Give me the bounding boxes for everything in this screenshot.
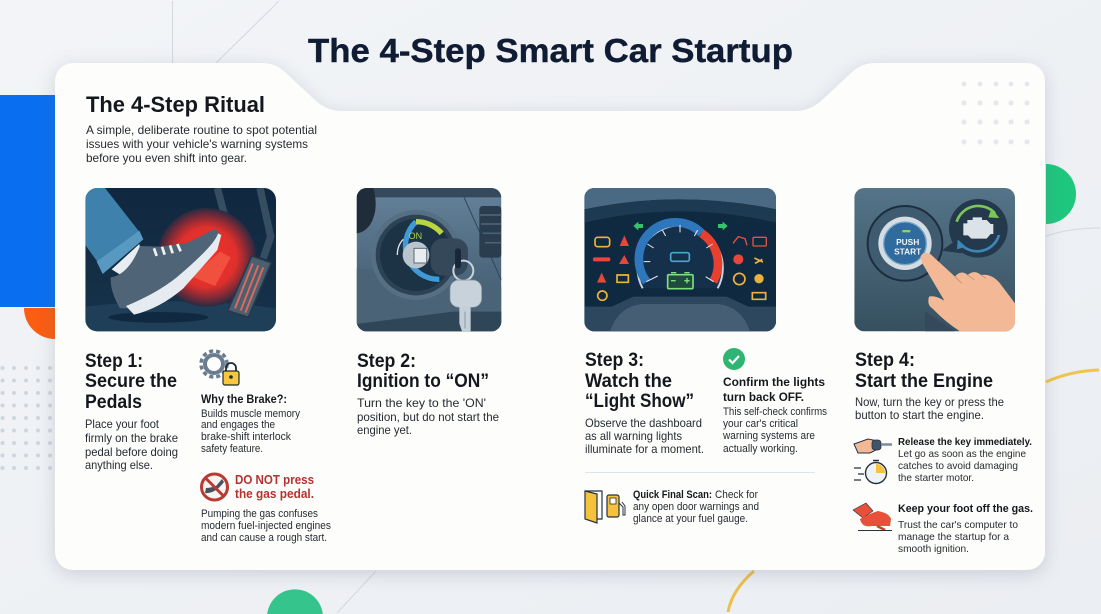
callout: quick final scan: any open door warnings and bbox=[633, 501, 759, 513]
text: step 3 body: Observe the dashboard bbox=[585, 416, 702, 430]
text: step 2 body: position, but do not start the bbox=[357, 410, 499, 424]
heading: step 2: Step 2: bbox=[357, 350, 416, 372]
callout: confirm the lights: turn back OFF. bbox=[723, 392, 804, 404]
callout: release the key bbox=[898, 436, 1032, 484]
callout: quick final scan: Check for bbox=[715, 489, 758, 501]
heading: step 4: Start the Engine bbox=[855, 370, 993, 392]
callout: confirm the lights: This self-check confirms bbox=[723, 406, 827, 418]
heading: step 3: Step 3: bbox=[585, 349, 644, 371]
callout: why the brake bbox=[201, 394, 300, 455]
icon: gear and padlock bbox=[201, 351, 239, 385]
text: step 1 body bbox=[85, 417, 178, 472]
callout: quick final scan: glance at your fuel gauge. bbox=[633, 513, 748, 525]
illustration: push start button: START bbox=[894, 247, 921, 257]
callout: why the brake: and engages the bbox=[201, 419, 275, 431]
callout: release the key: the starter motor. bbox=[898, 472, 974, 484]
text: pumping the gas bbox=[201, 508, 331, 544]
text: step 1 body: pedal before doing bbox=[85, 445, 178, 459]
panel: step 2 bbox=[357, 188, 501, 437]
illustration: key in ignition bbox=[357, 188, 501, 331]
callout: keep foot off gas: Trust the car's computer to bbox=[898, 519, 1018, 531]
panel: step 1 bbox=[85, 188, 331, 544]
callout: confirm the lights: your car's critical bbox=[723, 418, 798, 430]
callout: confirm the lights: Confirm the lights bbox=[723, 377, 825, 389]
callout: quick final scan bbox=[633, 489, 759, 525]
heading: step 4: Step 4: bbox=[855, 349, 915, 371]
text: step 4 body: Now, turn the key or press the bbox=[855, 395, 1004, 409]
icon: green check bbox=[723, 348, 745, 370]
callout: why the brake: Why the Brake?: bbox=[201, 394, 287, 406]
callout: why the brake: Builds muscle memory bbox=[201, 408, 300, 420]
card dot pattern bbox=[962, 82, 1030, 144]
callout: confirm the lights bbox=[722, 377, 827, 455]
callout: keep foot off gas bbox=[898, 503, 1033, 555]
warning: do not press: the gas pedal. bbox=[235, 486, 314, 501]
heading: step 2: Ignition to “ON” bbox=[357, 370, 489, 392]
intro text: before you even shift into gear. bbox=[86, 151, 247, 165]
callout: release the key: Let go as soon as the engine bbox=[898, 448, 1026, 460]
icon: hand with key bbox=[854, 439, 892, 453]
heading: step 3 bbox=[585, 349, 694, 412]
heading: step 1: Pedals bbox=[85, 391, 142, 413]
heading: step 3: Watch the bbox=[585, 370, 672, 392]
icon: stopwatch bbox=[854, 460, 886, 484]
callout: quick final scan: Quick Final Scan: bbox=[633, 489, 712, 501]
warning: do not press bbox=[235, 472, 314, 501]
callout: release the key: Release the key immediately. bbox=[898, 436, 1032, 448]
illustration: instrument cluster bbox=[584, 188, 776, 331]
heading: step 2 bbox=[357, 350, 489, 392]
callout: confirm the lights: warning systems are bbox=[722, 430, 815, 442]
heading: step 1: Step 1: bbox=[85, 350, 143, 372]
illustration: key in ignition: ON bbox=[409, 231, 422, 241]
text: step 1 body: firmly on the brake bbox=[85, 431, 178, 445]
illustration: push start button bbox=[854, 188, 1015, 331]
illustration: foot on brake pedal bbox=[85, 188, 276, 331]
callout: why the brake: brake-shift interlock bbox=[201, 431, 291, 443]
text: step 2 body bbox=[357, 396, 499, 437]
text: step 2 body: engine yet. bbox=[357, 423, 412, 437]
text: step 1 body: anything else. bbox=[85, 458, 153, 472]
callout: keep foot off gas: smooth ignition. bbox=[898, 543, 969, 555]
illustration: push start button: PUSH bbox=[896, 237, 919, 247]
intro text: issues with your vehicle's warning systems bbox=[86, 137, 308, 151]
text: step 4 body: button to start the engine. bbox=[855, 408, 984, 422]
text: pumping the gas: and can cause a rough start. bbox=[201, 532, 327, 544]
icon: foot off gas bbox=[853, 503, 892, 530]
text: pumping the gas: Pumping the gas confuses bbox=[201, 508, 318, 520]
panel: step 3 bbox=[584, 188, 827, 525]
callout: keep foot off gas: manage the startup for a bbox=[898, 531, 1009, 543]
callout: keep foot off gas: Keep your foot off the gas. bbox=[898, 503, 1033, 515]
warning: do not press: DO NOT press bbox=[235, 472, 314, 487]
main card bbox=[55, 63, 1045, 570]
icon: door and fuel pump bbox=[585, 491, 625, 523]
heading: step 3: “Light Show” bbox=[585, 390, 694, 412]
text: step 1 body: Place your foot bbox=[85, 417, 160, 431]
text: step 3 body: as all warning lights bbox=[585, 429, 682, 443]
callout: release the key: catches to avoid damaging bbox=[898, 460, 1018, 472]
intro text: A simple, deliberate routine to spot potential bbox=[86, 123, 317, 137]
text: step 3 body: illuminate for a moment. bbox=[585, 442, 704, 456]
panel: step 4 bbox=[853, 188, 1033, 555]
title: The 4-Step Smart Car Startup bbox=[308, 32, 793, 69]
callout: confirm the lights: actually working. bbox=[723, 443, 798, 455]
text: pumping the gas: modern fuel-injected engines bbox=[201, 520, 331, 532]
text: step 4 body bbox=[855, 395, 1004, 422]
heading: step 4 bbox=[855, 349, 993, 392]
callout: why the brake: safety feature. bbox=[201, 443, 263, 455]
intro text bbox=[86, 123, 317, 165]
icon: no gas pedal bbox=[202, 474, 228, 500]
heading: step 1: Secure the bbox=[85, 370, 177, 392]
heading: step 1 bbox=[85, 350, 177, 413]
intro heading: The 4-Step Ritual bbox=[86, 92, 265, 117]
text: step 3 body bbox=[585, 416, 704, 456]
text: step 2 body: Turn the key to the 'ON' bbox=[357, 396, 486, 410]
